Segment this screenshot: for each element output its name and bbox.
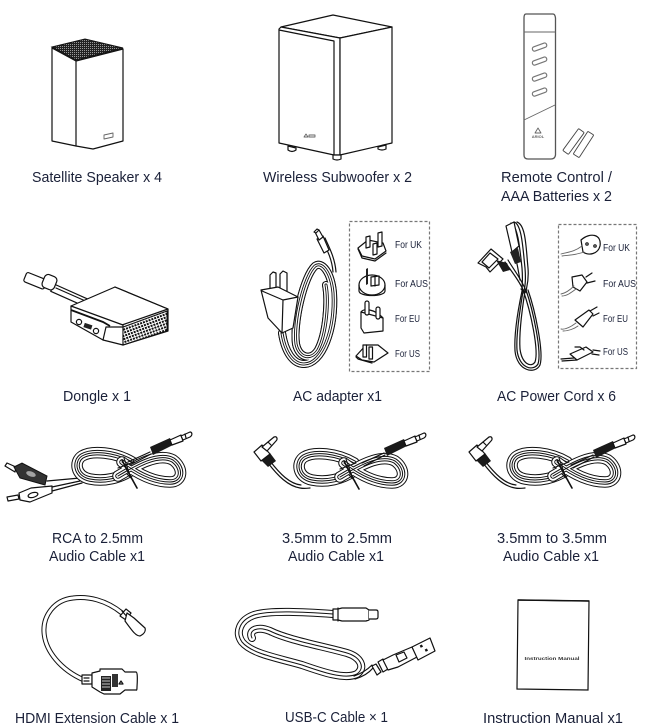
label: cord For EU: For EU bbox=[603, 313, 628, 325]
label: Audio Cable: Audio Cable x1 bbox=[288, 548, 384, 565]
item: remote control and batteries bbox=[501, 14, 613, 205]
dashed box bbox=[350, 222, 430, 372]
cord plug: UK bbox=[561, 235, 600, 256]
item: HDMI extension cable bbox=[15, 598, 179, 726]
icon: USB-C cable bbox=[239, 608, 435, 679]
item: dongle bbox=[23, 272, 168, 405]
label: 3.5mm to 2.5mm: 3.5mm to 2.5mm bbox=[282, 530, 392, 547]
label: remote control: Remote Control / bbox=[501, 169, 613, 186]
label: cord For UK: For UK bbox=[603, 242, 630, 254]
item: RCA audio cable bbox=[5, 432, 192, 565]
icon: RCA cable bbox=[5, 432, 192, 502]
icon: 3.5mm to 2.5mm cable bbox=[254, 433, 426, 489]
label: wireless subwoofer: Wireless Subwoofer x 2 bbox=[263, 169, 412, 186]
item: instruction manual bbox=[483, 600, 623, 726]
item: wireless subwoofer bbox=[263, 15, 412, 186]
label: AC adapter: AC adapter x1 bbox=[293, 388, 382, 405]
label: For US: For US bbox=[395, 348, 420, 360]
cord plug: EU bbox=[561, 307, 599, 331]
label: Audio Cable: Audio Cable x1 bbox=[503, 548, 599, 565]
icon: remote control: ARIOL bbox=[532, 134, 545, 139]
label: dongle: Dongle x 1 bbox=[63, 388, 131, 405]
icon: HDMI cable bbox=[44, 598, 145, 694]
icon: AC adapter with cable bbox=[261, 229, 336, 364]
dashed box bbox=[558, 224, 636, 368]
label: Audio Cable: Audio Cable x1 bbox=[49, 548, 145, 565]
item: satellite speaker bbox=[32, 39, 162, 186]
label: cord For AUS: For AUS bbox=[603, 278, 636, 290]
icon: instruction manual booklet: Instruction Manual bbox=[524, 656, 580, 662]
item: 3.5mm to 2.5mm audio cable bbox=[254, 433, 426, 565]
item: AC adapter bbox=[261, 222, 430, 405]
plug: UK bbox=[358, 232, 386, 261]
icon: AC power cord bbox=[478, 222, 541, 370]
label: 3.5mm to 3.5mm: 3.5mm to 3.5mm bbox=[497, 530, 607, 547]
plug: AUS bbox=[359, 268, 385, 296]
item: AC power cord bbox=[478, 222, 636, 405]
label: For UK: For UK bbox=[395, 239, 422, 251]
icon: satellite speaker bbox=[52, 39, 123, 149]
plug: US bbox=[356, 345, 388, 363]
plug: EU bbox=[361, 301, 383, 333]
label: AAA batteries: AAA Batteries x 2 bbox=[501, 188, 612, 205]
label: For AUS: For AUS bbox=[395, 278, 428, 290]
icon: wireless subwoofer bbox=[279, 15, 392, 160]
label: RCA to 2.5mm: RCA to 2.5mm bbox=[52, 530, 143, 547]
icon: 3.5mm to 3.5mm cable bbox=[469, 435, 635, 488]
item: USB-C cable bbox=[239, 608, 435, 726]
cord plug: US bbox=[561, 347, 600, 361]
cord plug: AUS bbox=[561, 273, 595, 296]
icon: remote control bbox=[524, 14, 556, 159]
label: AC power cord: AC Power Cord x 6 bbox=[497, 388, 616, 405]
adapter plug options panel bbox=[350, 222, 430, 372]
label: USB-C cable: USB-C Cable × 1 bbox=[285, 709, 388, 726]
item: 3.5mm to 3.5mm audio cable bbox=[469, 435, 635, 565]
icon: dongle bbox=[23, 272, 168, 345]
icon: AAA batteries bbox=[563, 129, 594, 158]
label: For EU: For EU bbox=[395, 313, 420, 325]
label: satellite speaker: Satellite Speaker x 4 bbox=[32, 169, 162, 186]
label: cord For US: For US bbox=[603, 346, 628, 358]
cord plug options panel bbox=[558, 224, 636, 368]
